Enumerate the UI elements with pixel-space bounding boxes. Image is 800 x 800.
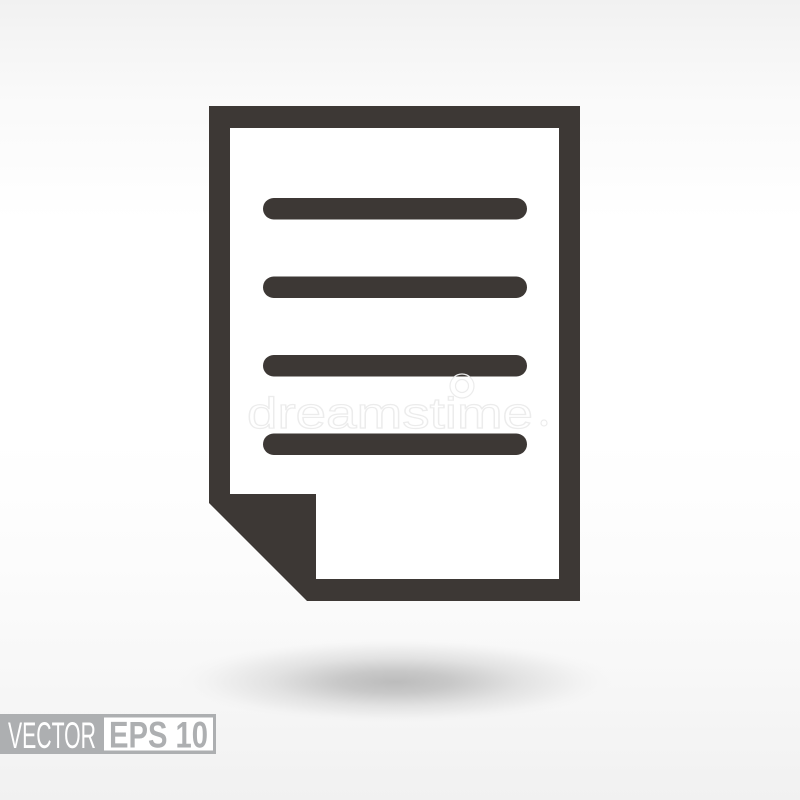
icon: page interior	[230, 128, 559, 579]
icon: page outline with folded corner	[209, 106, 580, 601]
text lines	[263, 198, 527, 455]
badge text: VECTOR: VECTOR	[8, 715, 96, 756]
badge text: EPS 10: EPS 10	[109, 714, 208, 756]
watermark: dreamstime	[247, 389, 533, 438]
